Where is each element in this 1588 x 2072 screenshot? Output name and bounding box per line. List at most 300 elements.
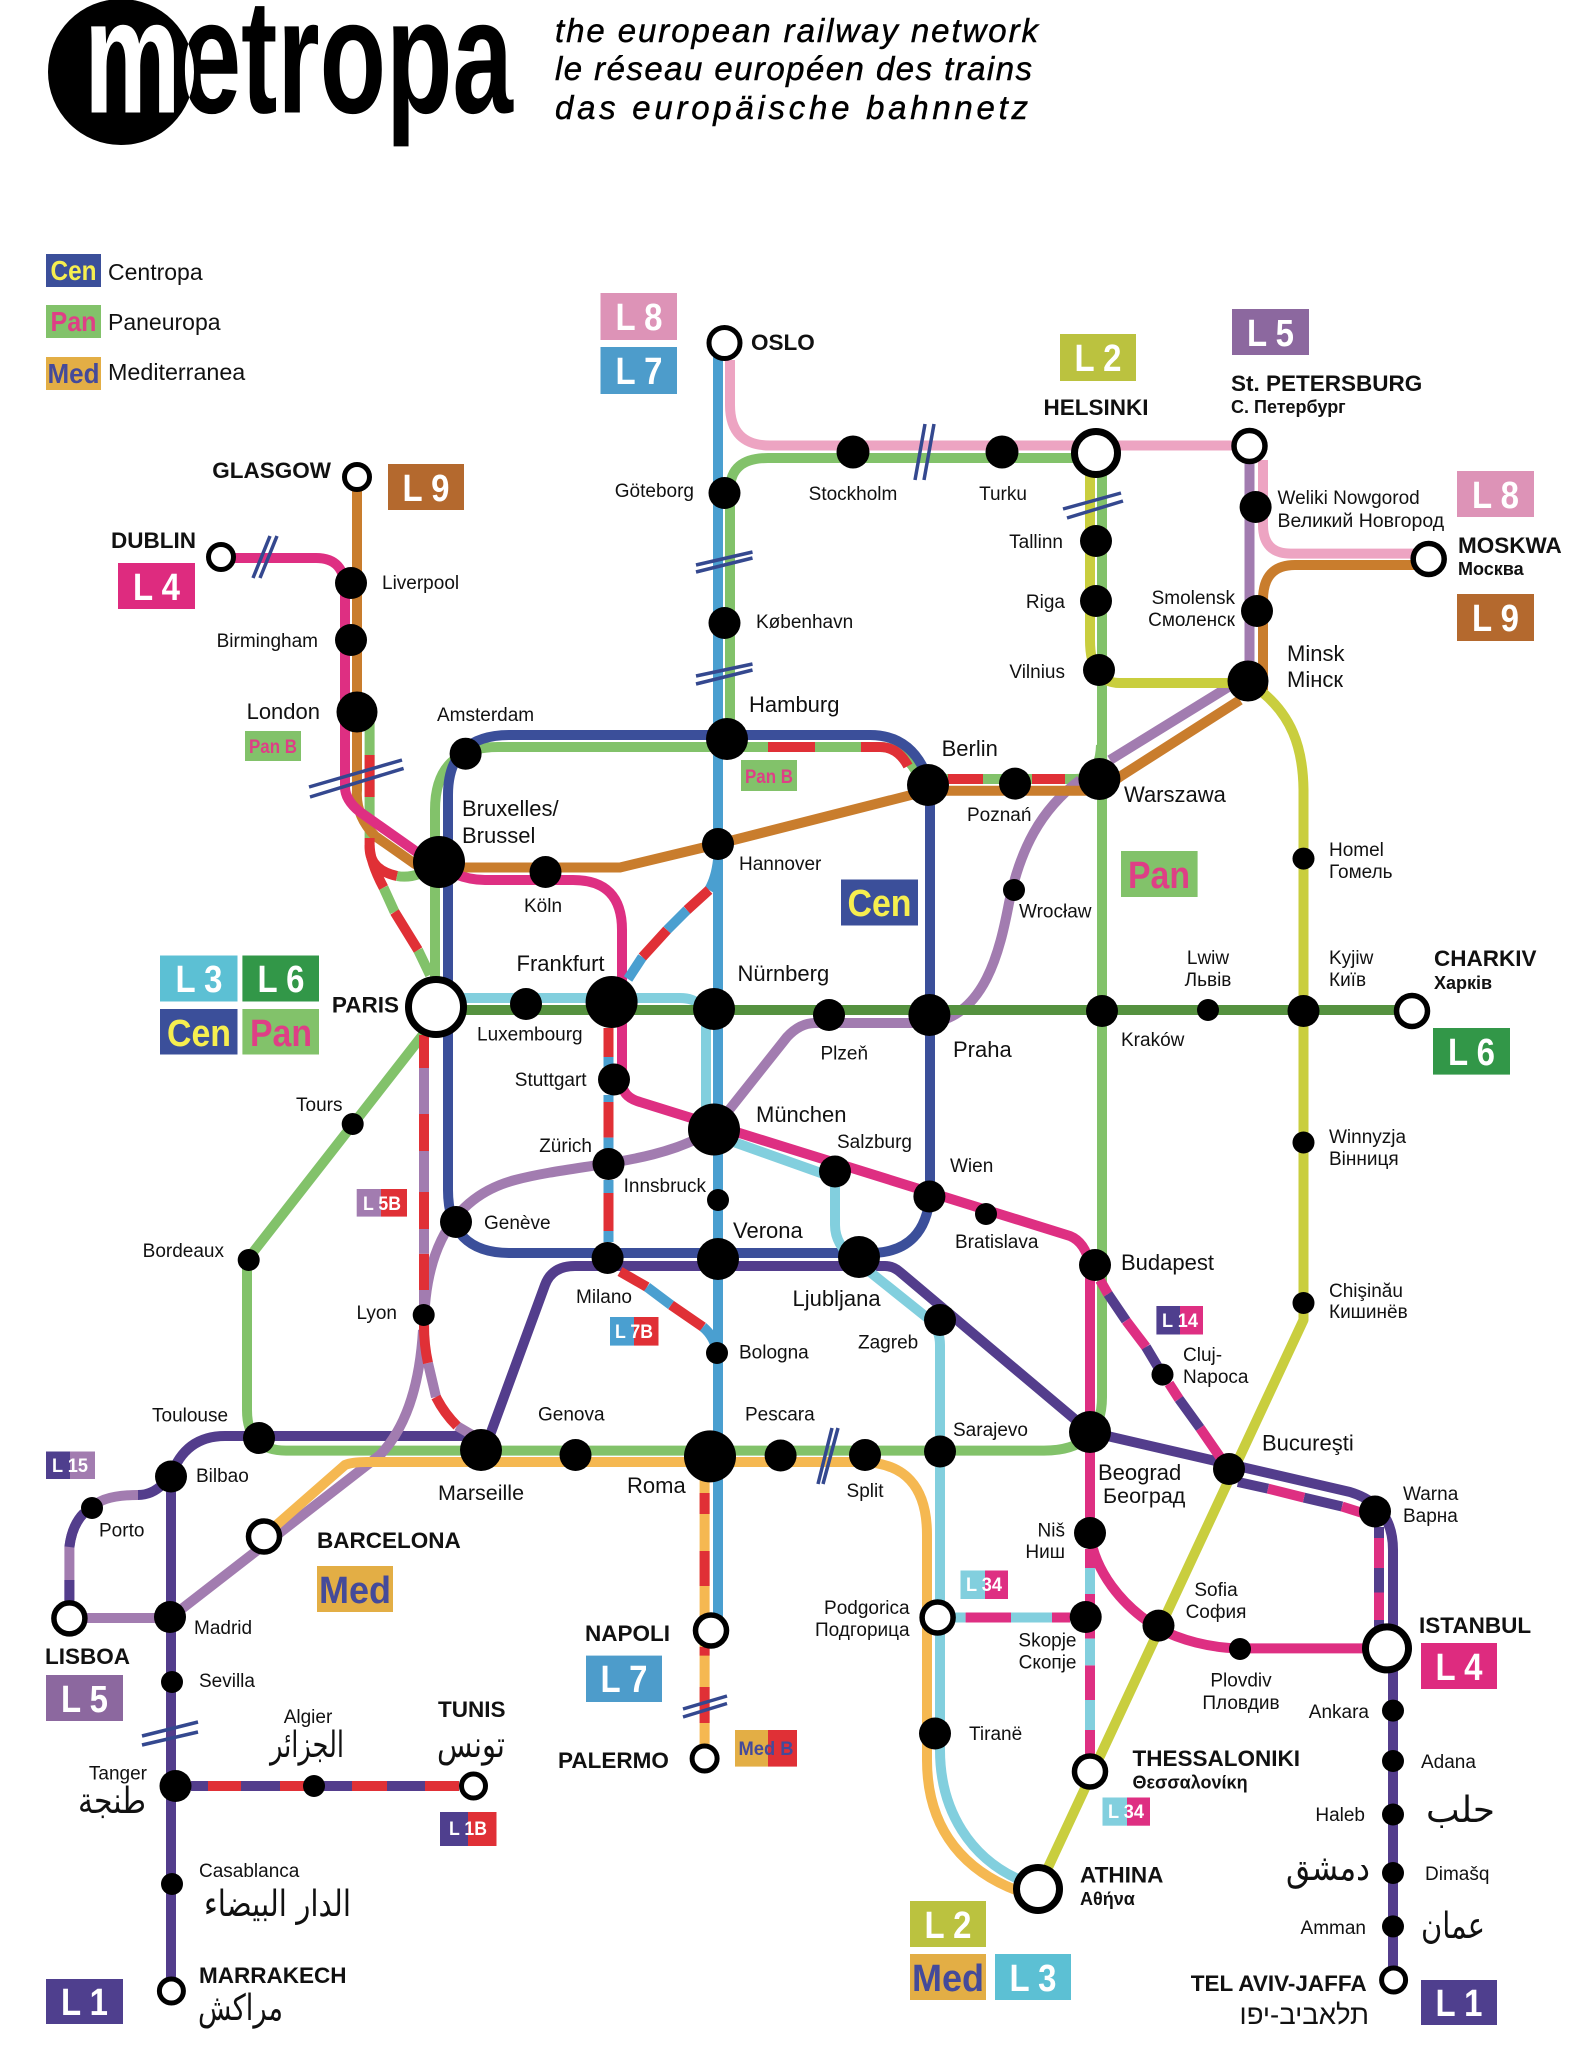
badge L7 Napoli	[586, 1656, 662, 1702]
station Sofia: София	[1186, 1602, 1246, 1623]
station Skopje: Skopje	[1018, 1631, 1076, 1652]
station Minsk: Minsk	[1287, 641, 1345, 666]
station Frankfurt	[516, 951, 638, 1028]
station Genève	[440, 1206, 551, 1238]
badge L7 Oslo: L 7	[616, 351, 662, 393]
badge L5B	[357, 1189, 407, 1217]
station Ankara	[1309, 1700, 1404, 1723]
station Thessaloniki	[1074, 1746, 1300, 1792]
station Stuttgart: Stuttgart	[515, 1070, 587, 1091]
station Paris	[332, 980, 464, 1034]
station Minsk	[1228, 641, 1345, 702]
station Zagreb	[858, 1304, 956, 1354]
station Pescara: Pescara	[745, 1405, 815, 1426]
station Tanger	[78, 1764, 192, 1822]
station Chişinău	[1292, 1281, 1408, 1323]
station Innsbruck: Innsbruck	[624, 1176, 706, 1197]
station Wien	[913, 1156, 993, 1212]
station Thessaloniki: Θεσσαλονίκη	[1132, 1772, 1248, 1792]
station Roma: Roma	[627, 1473, 686, 1498]
station Amsterdam	[437, 705, 534, 770]
line Pan	[247, 458, 1102, 1451]
badge Pan Paris: Pan	[250, 1013, 312, 1055]
badge L5 St Petersburg: L 5	[1247, 313, 1294, 355]
station Plovdiv	[1202, 1638, 1280, 1714]
badge L7B	[610, 1317, 658, 1346]
station Glasgow: GLASGOW	[212, 458, 332, 483]
station Luxembourg: Luxembourg	[477, 1025, 583, 1046]
station Turku: Turku	[979, 484, 1027, 505]
station Kyjiw	[1288, 948, 1374, 1027]
station Plovdiv: Пловдив	[1202, 1693, 1280, 1714]
station Milano: Milano	[576, 1287, 632, 1308]
badge Pan B Hamburg	[741, 760, 797, 791]
station Oslo: OSLO	[751, 330, 815, 355]
station London	[247, 692, 378, 732]
station Skopje: Скопје	[1019, 1653, 1076, 1674]
badge L34 Thessaloniki	[1102, 1798, 1150, 1826]
station Köln: Köln	[524, 896, 562, 917]
tagline: le réseau européen des trains	[555, 50, 1032, 87]
badge L2 Athina: L 2	[924, 1905, 972, 1947]
badge Med B	[735, 1730, 797, 1767]
station Poznań: Poznań	[967, 805, 1031, 826]
station Marrakech: MARRAKECH	[199, 1963, 346, 1988]
station Winnyzja: Вінниця	[1329, 1149, 1399, 1170]
station Hamburg	[706, 692, 839, 760]
badge Med Barcelona: Med	[319, 1570, 391, 1612]
station Bordeaux	[143, 1241, 260, 1271]
station Palermo: PALERMO	[558, 1748, 669, 1773]
badge L7 Oslo	[600, 347, 677, 394]
station Frankfurt: Frankfurt	[516, 951, 605, 976]
badge L5 Lisboa	[46, 1675, 123, 1721]
station Bologna	[706, 1342, 809, 1364]
station Bilbao	[155, 1460, 249, 1492]
station Moskwa	[1413, 533, 1562, 579]
station Pescara	[745, 1405, 815, 1472]
station Tallinn: Tallinn	[1009, 532, 1063, 553]
station Birmingham	[217, 624, 367, 656]
station Nürnberg	[693, 961, 829, 1030]
station Tunis	[437, 1697, 506, 1798]
station Budapest	[1079, 1249, 1214, 1281]
station Liverpool: Liverpool	[382, 573, 459, 594]
line Med B dashes	[700, 1493, 710, 1723]
station Istanbul	[1366, 1613, 1531, 1670]
station Turku	[979, 436, 1027, 505]
station Sevilla	[161, 1671, 255, 1693]
station München: München	[756, 1102, 847, 1127]
legend	[46, 254, 245, 390]
station Porto: Porto	[99, 1520, 144, 1542]
line Cen	[448, 735, 930, 1253]
station Algier: Algier	[284, 1707, 333, 1728]
station Madrid	[154, 1601, 252, 1639]
station Genova: Genova	[538, 1405, 605, 1426]
line L15 dashes	[69, 1484, 163, 1603]
station Budapest: Budapest	[1121, 1250, 1214, 1275]
station Salzburg	[819, 1132, 912, 1188]
badge L15: L 15	[52, 1456, 88, 1477]
badge L6 Charkiv: L 6	[1448, 1032, 1495, 1074]
station Tunis: تونس	[437, 1725, 505, 1766]
station Chişinău: Кишинёв	[1329, 1302, 1408, 1323]
station København	[708, 607, 853, 639]
station Moskwa: MOSKWA	[1458, 533, 1562, 558]
badge Med B: Med B	[738, 1739, 794, 1760]
station Lwiw	[1185, 948, 1231, 1021]
station Berlin: Berlin	[942, 736, 998, 761]
station Praha	[908, 994, 1012, 1062]
badge Pan centre: Pan	[1128, 855, 1190, 897]
station Beograd: Београд	[1103, 1484, 1186, 1508]
station Casablanca: الدار البيضاء	[204, 1884, 351, 1925]
station Tanger: طنجة	[78, 1781, 146, 1822]
station Bratislava: Bratislava	[955, 1232, 1039, 1253]
station Smolensk: Смоленск	[1148, 610, 1236, 631]
station Warna: Warna	[1403, 1484, 1459, 1505]
badge Pan B London: Pan B	[249, 737, 297, 758]
station Niš: Ниш	[1025, 1542, 1065, 1563]
badge L5 Lisboa: L 5	[61, 1679, 108, 1721]
station München	[688, 1102, 847, 1156]
station Adana	[1382, 1750, 1476, 1773]
station St Petersburg: С. Петербург	[1231, 397, 1346, 417]
station Cluj-Napoca: Cluj-	[1183, 1345, 1222, 1366]
station Bruxelles: Brussel	[462, 823, 535, 848]
station Genova	[538, 1405, 605, 1471]
station Casablanca	[161, 1861, 351, 1925]
station Homel: Гомель	[1329, 862, 1393, 883]
badge Cen Paris: Cen	[167, 1013, 231, 1055]
station Hannover	[702, 828, 822, 875]
badge L34 Thessaloniki: L 34	[1108, 1802, 1144, 1823]
line L3	[436, 998, 1025, 1882]
station Sofia: Sofia	[1194, 1580, 1238, 1601]
badge L1B	[440, 1812, 496, 1846]
station Bruxelles: Bruxelles/	[462, 796, 559, 821]
badge L6 Paris	[242, 956, 319, 1002]
south-east stations	[815, 1411, 1531, 2030]
badge L5B: L 5B	[363, 1194, 401, 1215]
badge L1 Tel Aviv: L 1	[1436, 1983, 1482, 2025]
station Athina: ATHINA	[1080, 1862, 1163, 1888]
station Warszawa: Warszawa	[1124, 782, 1227, 807]
station București: Bucureşti	[1262, 1431, 1354, 1456]
legend: Paneuropa	[108, 309, 221, 335]
station Zürich	[539, 1136, 624, 1180]
sea crossing marks	[142, 424, 1123, 1745]
station Milano	[576, 1242, 632, 1308]
station Wrocław	[1003, 879, 1092, 922]
station Vilnius	[1009, 654, 1115, 686]
station Praha: Praha	[953, 1037, 1012, 1062]
station Haleb: حلب	[1426, 1790, 1495, 1831]
station Porto	[81, 1497, 144, 1542]
rail network lines	[69, 350, 1428, 1991]
station Vilnius: Vilnius	[1009, 662, 1065, 683]
station Verona: Verona	[733, 1218, 803, 1243]
badge L2 Helsinki: L 2	[1074, 338, 1122, 380]
station Roma	[627, 1430, 736, 1498]
station Sarajevo: Sarajevo	[953, 1420, 1028, 1441]
station Thessaloniki: THESSALONIKI	[1132, 1746, 1300, 1771]
line L2	[1038, 455, 1304, 1889]
station Warna: Варна	[1403, 1506, 1458, 1527]
station Moskwa: Москва	[1458, 559, 1525, 579]
station Barcelona: BARCELONA	[317, 1528, 461, 1553]
station Stockholm: Stockholm	[809, 484, 897, 505]
station Skopje	[1018, 1601, 1102, 1674]
station Beograd: Beograd	[1098, 1460, 1181, 1485]
badge L8 Moskwa: L 8	[1472, 475, 1519, 517]
legend: Mediterranea	[108, 359, 245, 385]
station Zürich: Zürich	[539, 1136, 592, 1157]
station Warna	[1359, 1484, 1459, 1528]
badge L2 Helsinki	[1060, 334, 1136, 381]
badge Med Athina: Med	[912, 1958, 984, 2000]
station Genève: Genève	[484, 1213, 551, 1234]
station Tiranë: Tiranë	[969, 1724, 1022, 1745]
line L5B dashes	[424, 1035, 457, 1426]
station Podgorica	[815, 1598, 953, 1641]
badge L7 Napoli: L 7	[600, 1659, 648, 1701]
station Ankara: Ankara	[1309, 1702, 1369, 1723]
station Tiranë	[919, 1718, 1022, 1750]
badge L3 Paris: L 3	[176, 959, 222, 1001]
station København: København	[756, 612, 853, 633]
station București	[1213, 1431, 1354, 1485]
station Helsinki	[1043, 395, 1149, 474]
badge L34 Podgorica	[960, 1570, 1008, 1599]
station Winnyzja: Winnyzja	[1329, 1127, 1407, 1148]
station Oslo	[709, 328, 815, 358]
south-west stations	[45, 1405, 815, 2029]
station Stuttgart	[515, 1064, 630, 1096]
station Haleb: Haleb	[1315, 1805, 1365, 1826]
station Kraków	[1086, 995, 1185, 1051]
station London: London	[247, 699, 320, 724]
line badges	[46, 293, 1534, 2025]
badge L6 Paris: L 6	[258, 959, 304, 1001]
station Weliki Nowgorod: Великий Новгород	[1278, 510, 1445, 532]
badge L7B: L 7B	[615, 1322, 653, 1343]
tagline: the european railway network	[555, 12, 1040, 49]
station Birmingham: Birmingham	[217, 631, 318, 652]
legend: Pan	[50, 306, 96, 337]
badge L1 Tel Aviv	[1421, 1980, 1497, 2025]
badge L5 St Petersburg	[1232, 309, 1309, 355]
station Dimašq: Dimašq	[1425, 1864, 1489, 1885]
line L1B dashes	[191, 1781, 459, 1791]
badge L4 Istanbul	[1421, 1643, 1497, 1689]
station Cluj-Napoca: Napoca	[1183, 1367, 1249, 1388]
station Niš: Niš	[1038, 1520, 1065, 1542]
station Niš	[1025, 1517, 1106, 1563]
station Göteborg: Göteborg	[615, 481, 694, 502]
station Bologna: Bologna	[739, 1343, 809, 1364]
station Podgorica: Podgorica	[824, 1598, 910, 1619]
station Madrid: Madrid	[194, 1618, 252, 1639]
station Plovdiv: Plovdiv	[1210, 1670, 1272, 1692]
tagline: das europäische bahnnetz	[555, 89, 1028, 126]
legend: Centropa	[108, 259, 203, 285]
station Dimašq	[1286, 1848, 1489, 1889]
station Kyjiw: Київ	[1329, 970, 1366, 991]
station Winnyzja	[1292, 1127, 1407, 1170]
station Marseille: Marseille	[438, 1481, 524, 1505]
badge L3 Paris	[160, 956, 238, 1002]
station Kraków: Kraków	[1121, 1030, 1185, 1051]
badge L9 Moskwa: L 9	[1472, 598, 1519, 640]
station Lisboa	[45, 1603, 130, 1669]
station Glasgow	[212, 458, 370, 490]
station Tel Aviv-Jaffa: TEL AVIV-JAFFA	[1191, 1971, 1367, 1996]
station Toulouse	[152, 1406, 275, 1454]
station Liverpool	[335, 567, 459, 599]
badge L1 Marrakech	[46, 1979, 123, 2024]
badge L9 Glasgow: L 9	[402, 468, 450, 510]
badge L14: L 14	[1162, 1311, 1198, 1332]
badge L8 Oslo: L 8	[616, 297, 662, 339]
station Smolensk	[1148, 588, 1273, 631]
station Charkiv: CHARKIV	[1434, 946, 1537, 971]
station Amman: Amman	[1301, 1918, 1366, 1939]
badge L14	[1156, 1306, 1203, 1334]
badge L9 Glasgow	[388, 464, 464, 510]
station Split: Split	[847, 1481, 884, 1502]
station Haleb	[1315, 1790, 1495, 1831]
station Bruxelles	[413, 796, 559, 888]
station Luxembourg	[477, 988, 583, 1046]
station Athina	[1016, 1862, 1163, 1910]
badge L4 Istanbul: L 4	[1436, 1647, 1482, 1689]
station Nürnberg: Nürnberg	[738, 961, 829, 986]
station Homel	[1292, 840, 1393, 883]
line L14 dashes	[1100, 1280, 1379, 1627]
station Podgorica: Подгорица	[815, 1620, 910, 1641]
badge Pan B London	[245, 731, 301, 761]
station Kyjiw: Kyjiw	[1329, 948, 1374, 969]
station Tel Aviv-Jaffa: תלאביב-יפו	[1240, 1999, 1369, 2030]
station Tunis: TUNIS	[438, 1697, 506, 1722]
station Athina: Αθήνα	[1080, 1889, 1135, 1909]
station Tours: Tours	[296, 1095, 342, 1116]
station Ljubljana: Ljubljana	[792, 1286, 881, 1311]
central stations	[143, 692, 1537, 1388]
station Lwiw: Львів	[1185, 970, 1231, 991]
badge L1B: L 1B	[449, 1819, 487, 1840]
station Napoli	[585, 1615, 726, 1646]
station Tallinn	[1009, 525, 1112, 557]
station Paris: PARIS	[332, 993, 399, 1018]
station Salzburg: Salzburg	[837, 1132, 912, 1153]
badge L4 Dublin	[118, 563, 195, 609]
station Cluj-Napoca	[1152, 1345, 1249, 1388]
station Lyon: Lyon	[356, 1303, 397, 1324]
station Barcelona	[248, 1521, 461, 1553]
station Homel: Homel	[1329, 840, 1384, 861]
station Marrakech	[159, 1963, 346, 2029]
station Bratislava	[955, 1203, 1039, 1253]
station Berlin	[907, 736, 998, 806]
badge L2 Athina	[910, 1901, 986, 1947]
line L7B dashes	[608, 860, 718, 1353]
badge L1 Marrakech: L 1	[61, 1982, 108, 2024]
station Minsk: Мінск	[1287, 667, 1343, 692]
line L5	[69, 446, 1250, 1618]
station Beograd	[1069, 1411, 1186, 1508]
badge L4 Dublin: L 4	[133, 567, 180, 609]
line L1	[171, 1266, 1393, 1991]
badge Cen centre: Cen	[848, 883, 912, 925]
station Sarajevo	[924, 1420, 1028, 1468]
station Hannover: Hannover	[739, 854, 822, 875]
badge L9 Moskwa	[1457, 594, 1534, 641]
station Sevilla: Sevilla	[199, 1671, 255, 1692]
station Stockholm	[809, 436, 897, 505]
badge L8 Oslo	[600, 293, 677, 340]
station Sofia	[1142, 1580, 1246, 1642]
station Weliki Nowgorod	[1240, 488, 1445, 532]
badge L15	[46, 1452, 95, 1479]
badge L3 Athina: L 3	[1010, 1958, 1056, 2000]
station Riga: Riga	[1026, 592, 1065, 613]
station St Petersburg	[1231, 371, 1422, 462]
line Med	[264, 1456, 1030, 1895]
station Riga	[1026, 585, 1112, 617]
station Innsbruck	[624, 1176, 729, 1211]
station Zagreb: Zagreb	[858, 1333, 918, 1354]
station Dublin: DUBLIN	[111, 528, 196, 553]
legend: Cen	[50, 255, 96, 286]
line L9	[357, 477, 1428, 868]
station Palermo	[558, 1746, 717, 1773]
station Algier	[269, 1707, 344, 1797]
badge L34 Podgorica: L 34	[966, 1575, 1002, 1596]
station Napoli: NAPOLI	[585, 1621, 670, 1646]
station Marrakech: مراكش	[198, 1988, 283, 2029]
station Verona	[697, 1218, 803, 1280]
station Marseille	[438, 1429, 524, 1505]
station Split	[847, 1439, 884, 1502]
line L6	[436, 1005, 1412, 1015]
station Weliki Nowgorod: Weliki Nowgorod	[1278, 488, 1420, 509]
tagline	[555, 12, 1040, 126]
station Charkiv	[1396, 946, 1537, 1026]
station Dublin	[111, 528, 234, 570]
legend: Med	[48, 358, 100, 389]
line L7	[713, 350, 723, 1630]
station Tel Aviv-Jaffa	[1191, 1968, 1406, 2030]
station Plzeň: Plzeň	[820, 1044, 868, 1064]
station Amman: عمان	[1421, 1906, 1485, 1947]
line L8	[730, 360, 1428, 554]
badge Pan B Hamburg: Pan B	[745, 767, 793, 788]
station Casablanca: Casablanca	[199, 1861, 300, 1882]
station Lyon	[356, 1303, 435, 1326]
north stations	[111, 328, 1562, 732]
station Köln	[524, 856, 562, 917]
station Toulouse: Toulouse	[152, 1406, 228, 1426]
station Istanbul: ISTANBUL	[1419, 1613, 1531, 1638]
station Amsterdam: Amsterdam	[437, 705, 534, 726]
station Wien: Wien	[950, 1156, 993, 1177]
station Warszawa	[1078, 758, 1227, 807]
station St Petersburg: St. PETERSBURG	[1231, 371, 1422, 396]
station Plzeň	[813, 999, 868, 1064]
